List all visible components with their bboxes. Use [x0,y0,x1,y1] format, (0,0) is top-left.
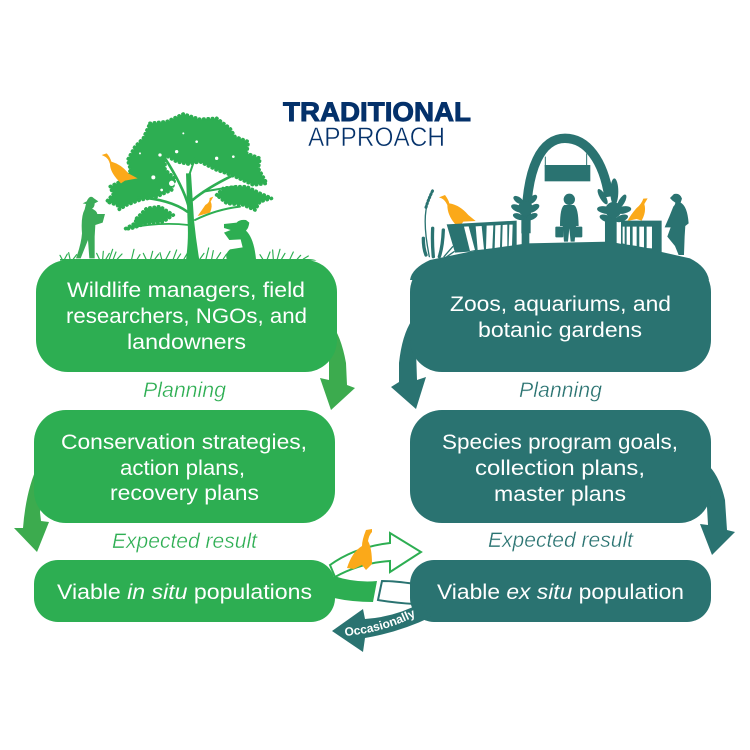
arrow: occasionally: Occasionally [345,610,414,636]
label: expected result teal: Expected result [488,528,634,552]
arrow: teal planning arrow [391,320,426,409]
panel: species program goals: Species program goals, [442,430,678,454]
title: TRADITIONAL [283,97,471,127]
icon: large orange bird [102,153,138,183]
panel: wildlife managers: researchers, NGOs, and [66,304,307,328]
plant: lavender stalk and spiky leaves [423,189,454,257]
panel: conservation strategies: recovery plans [110,481,259,505]
panel: wildlife managers: landowners [127,330,246,354]
panel: species program goals: master plans [494,482,626,506]
panel: wildlife managers: Wildlife managers, field [67,278,305,302]
title [283,97,471,152]
panel: zoos, aquariums, gardens: Zoos, aquariums, and [450,292,671,316]
panel: viable ex situ population [410,560,711,622]
hill [410,242,709,280]
arch [526,138,609,233]
panel: viable in situ populations [34,560,335,622]
panel: conservation strategies: action plans, [120,456,245,480]
illustration: field scene with tree, people and birds [60,114,317,261]
panel: wildlife managers [36,260,337,372]
arrow: filled green transfer tail [334,576,377,602]
panel: conservation strategies: Conservation strategies, [61,430,307,454]
icon: seated person with binoculars [224,220,256,259]
panel: zoos, aquariums, gardens: botanic gardens [478,318,642,342]
icon: right orange bird [627,198,648,221]
tree trunk and branches [127,157,240,260]
arrow: green planning arrow [320,322,355,410]
tree canopy [107,114,272,229]
arrow: occasionally [332,608,424,652]
icon: person with clipboard [76,197,105,258]
panel: zoos, aquariums, gardens [410,260,711,372]
fences [447,221,662,253]
sign [545,153,590,181]
panel: viable in situ populations: Viable in situ populations [57,580,312,604]
label: planning teal: Planning [519,378,602,402]
arrow: outlined teal return stub [378,581,415,604]
icon: orange bird on arrow [347,529,372,570]
panel: conservation strategies [34,410,335,523]
panel: viable ex situ population: Viable ex situ population [437,580,684,604]
icon: visitor carrying buckets [555,194,582,242]
label: planning green: Planning [143,378,226,402]
panel: species program goals: collection plans, [475,456,645,480]
icon: walking visitor with hat [665,194,689,255]
plants [510,178,632,247]
illustration: zoo scene with arch, visitors and birds [410,138,709,280]
icon: small orange bird [198,197,213,216]
label: expected result green: Expected result [112,529,258,553]
tree canopy specks [139,132,235,191]
grass [60,248,317,261]
arrow: outlined green transfer arrow [330,533,421,577]
title: APPROACH [308,122,445,152]
arrow: green expected result arrow [14,465,49,552]
panel: species program goals [410,410,711,523]
icon: left orange bird [439,195,476,226]
arrow: teal expected result arrow [700,467,735,555]
